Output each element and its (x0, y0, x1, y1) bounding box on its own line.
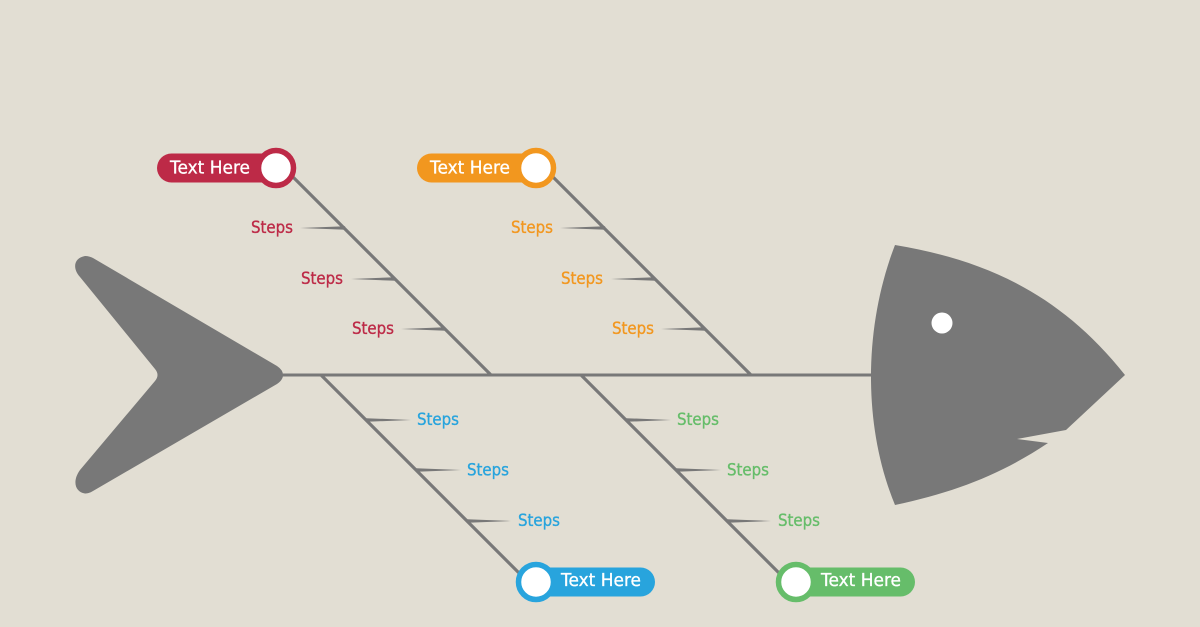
branch: blue: Steps (467, 460, 509, 480)
branch: orange: Steps (511, 218, 553, 237)
label: blue (518, 564, 655, 600)
branch: blue: Steps (417, 410, 459, 429)
branch: green: Steps (677, 410, 719, 429)
label: blue: Text Here (560, 571, 641, 591)
fish head (871, 245, 1125, 505)
branch: green (581, 375, 820, 578)
branch: green: Steps (727, 460, 769, 480)
label: red (157, 150, 294, 186)
branch: red: Steps (251, 218, 293, 237)
branch: orange (511, 172, 751, 375)
branch: green: Steps (778, 511, 820, 530)
branch: red: Steps (301, 269, 343, 288)
icon: fish eye (932, 312, 952, 334)
label: green: Text Here (820, 571, 901, 591)
branch: red: Steps (352, 319, 394, 338)
label: red: Text Here (169, 158, 250, 178)
fish spine (280, 374, 875, 376)
fish tail (75, 256, 283, 494)
label: orange: Text Here (429, 158, 510, 178)
branch: blue (321, 375, 560, 578)
label: green (778, 564, 915, 600)
branch: orange: Steps (561, 269, 603, 288)
branch: orange: Steps (612, 319, 654, 338)
branch: red (251, 172, 491, 375)
branch: blue: Steps (518, 511, 560, 530)
label: orange (417, 150, 554, 186)
